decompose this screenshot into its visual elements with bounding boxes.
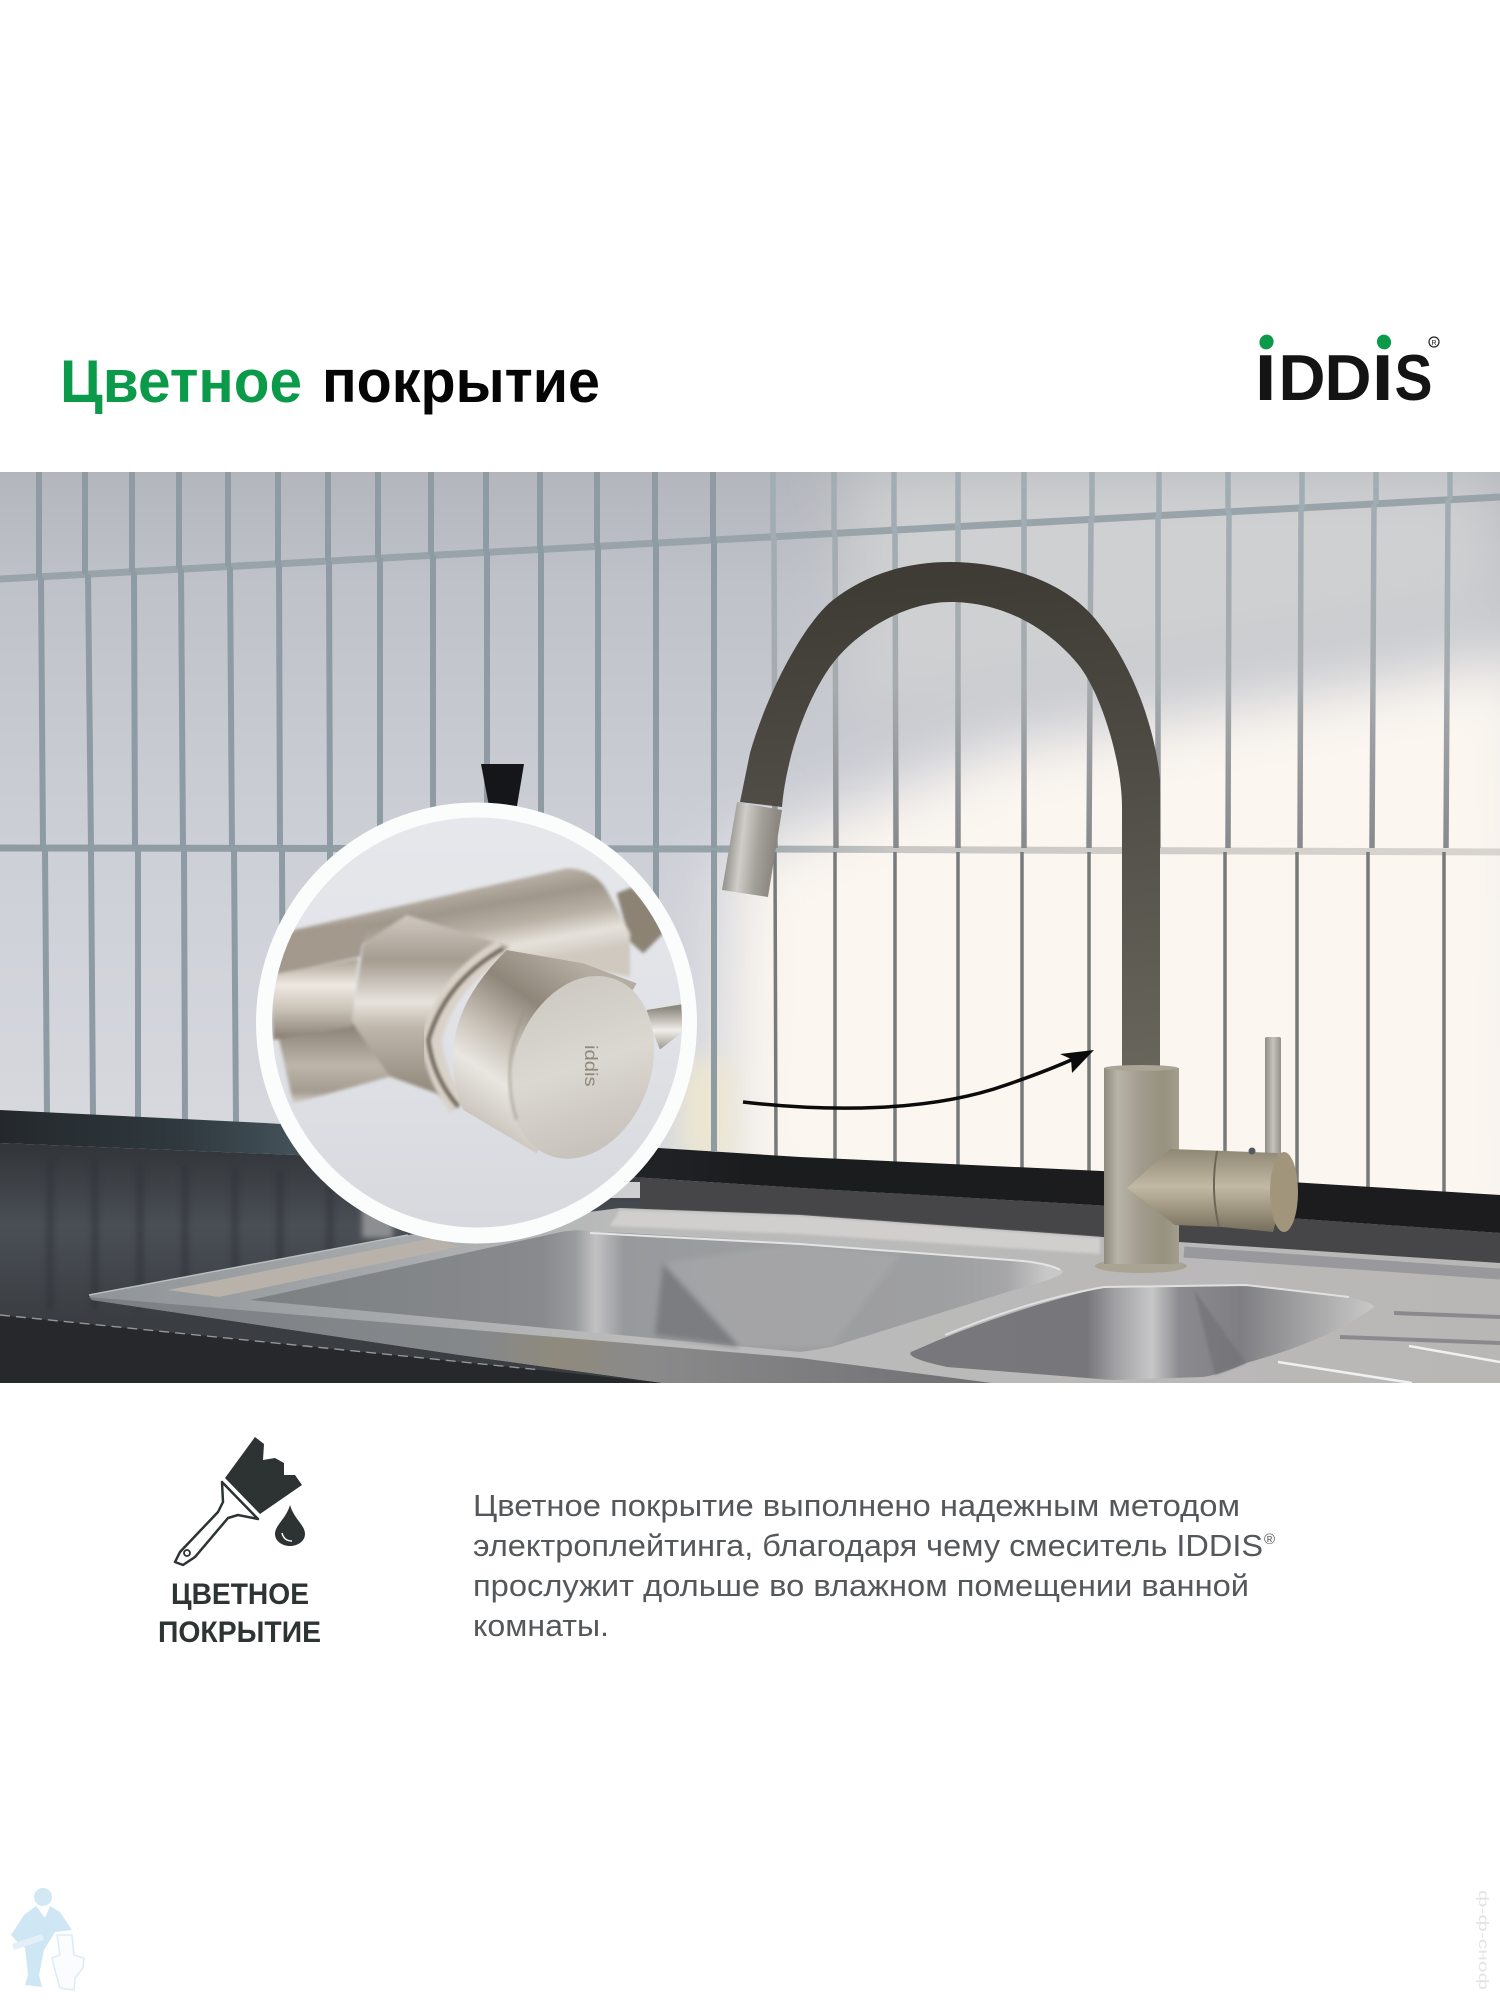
spout tube [740,562,1160,1068]
sink [89,1208,1500,1383]
lever [1265,1037,1281,1165]
description text: ® [1264,1531,1275,1548]
watermark: plumber with toilet [11,1888,84,1990]
title: Цветное [60,348,302,415]
tile wall [0,470,1500,1260]
bristles [225,1437,302,1514]
description text: прослужит дольше во влажном помещении ванной [473,1568,1249,1603]
logo: IDDIS [1255,332,1439,414]
back tube [293,868,670,977]
logo: IDDIS: D [1324,341,1372,414]
watermark: vertical site mark: ф-ф-сноф [1476,1890,1492,1990]
countertop [0,1143,1500,1383]
icon label: ПОКРЫТИЕ [158,1616,321,1649]
arrow [743,1050,1094,1108]
basin: large bowl [250,1230,1063,1352]
description text: электроплейтинга, благодаря чему смеситель IDDIS [473,1528,1263,1563]
description text: комнаты. [473,1608,609,1643]
basin: small bowl [910,1285,1374,1380]
logo: IDDIS: I [1255,341,1277,414]
left tube [270,915,510,1105]
icon: paint brush with drop [175,1437,305,1565]
zoom circle: coating close-up [250,800,710,1260]
logo: IDDIS: D [1278,341,1326,414]
title: покрытие [322,348,600,415]
small black object behind the zoom circle [481,764,524,806]
description text: Цветное покрытие выполнено надежным методом [473,1488,1240,1523]
icon label [158,1578,321,1649]
drop [275,1505,305,1546]
icon label: ЦВЕТНОЕ [171,1578,309,1611]
drain channel and grooves [1184,1252,1500,1274]
dark backsplash band [0,1110,1500,1233]
faucet [722,562,1298,1273]
collar [432,948,503,1107]
description text [473,1488,1275,1643]
handle [1127,1148,1298,1232]
handle [175,1482,258,1565]
logo: IDDIS: I [1372,341,1394,414]
logo: IDDIS: S [1394,341,1432,414]
base column [1095,1065,1187,1273]
logo: IDDIS: R [1432,340,1437,347]
nozzle [722,802,782,897]
photo: kitchen sink with faucet [0,470,1500,1383]
zoom circle: coating close-up: iddis [581,1045,601,1087]
title [60,348,600,415]
knob [453,950,637,1153]
